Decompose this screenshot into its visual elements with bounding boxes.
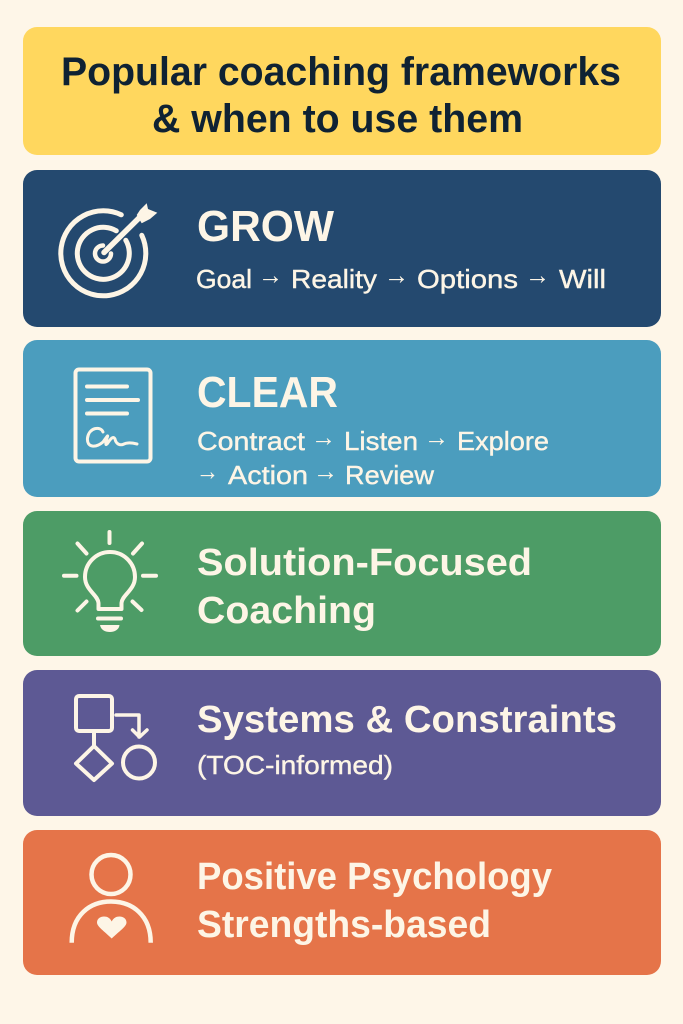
heading: title: Popular coaching frameworks	[61, 50, 621, 94]
text: CLEAR steps: Action	[228, 460, 308, 490]
heading: CLEAR: CLEAR	[197, 368, 338, 417]
text: GROW steps: →	[384, 260, 409, 290]
icon: target with arrow	[61, 203, 157, 296]
text: GROW steps: →	[525, 260, 550, 290]
text: GROW steps: Goal	[196, 264, 252, 294]
panel: title banner	[23, 27, 661, 155]
heading: Systems & Constraints: Systems & Constraints	[197, 699, 617, 741]
panel: Positive Psychology	[23, 830, 661, 975]
icon: person with heart	[72, 855, 151, 943]
icon: flow diagram	[76, 696, 155, 780]
icon: signed document	[76, 370, 150, 462]
text: CLEAR steps	[196, 422, 549, 490]
heading: Positive Psychology Strengths-based	[197, 856, 552, 946]
text: CLEAR steps: →	[424, 422, 449, 452]
panel: Systems & Constraints	[23, 670, 661, 816]
text: CLEAR steps: →	[313, 456, 338, 486]
heading: title	[61, 50, 621, 141]
text: CLEAR steps: Explore	[457, 426, 549, 456]
text: GROW steps: Options	[417, 264, 518, 294]
text: CLEAR steps: →	[311, 422, 336, 452]
text: CLEAR steps: →	[196, 456, 219, 486]
icon: light bulb	[64, 532, 156, 632]
text: GROW steps	[196, 260, 606, 294]
text: CLEAR steps: Listen	[344, 426, 418, 456]
text: TOC-informed: (TOC-informed)	[197, 750, 393, 780]
text: GROW steps: Will	[559, 264, 606, 294]
heading: Positive Psychology Strengths-based: Strengths-based	[197, 904, 491, 946]
panel: CLEAR	[23, 340, 661, 497]
text: CLEAR steps: Contract	[197, 426, 306, 456]
text: CLEAR steps: Review	[345, 460, 434, 490]
heading: Solution-Focused Coaching	[197, 542, 532, 632]
text: GROW steps: Reality	[291, 264, 377, 294]
text: GROW steps: →	[258, 260, 283, 290]
heading: GROW: GROW	[197, 202, 334, 251]
heading: title: & when to use them	[152, 97, 523, 141]
heading: Positive Psychology Strengths-based: Positive Psychology	[197, 856, 552, 898]
heading: Solution-Focused Coaching: Coaching	[197, 590, 376, 632]
heading: Solution-Focused Coaching: Solution-Focused	[197, 542, 532, 584]
panel: GROW	[23, 170, 661, 327]
panel: Solution-Focused Coaching	[23, 511, 661, 656]
